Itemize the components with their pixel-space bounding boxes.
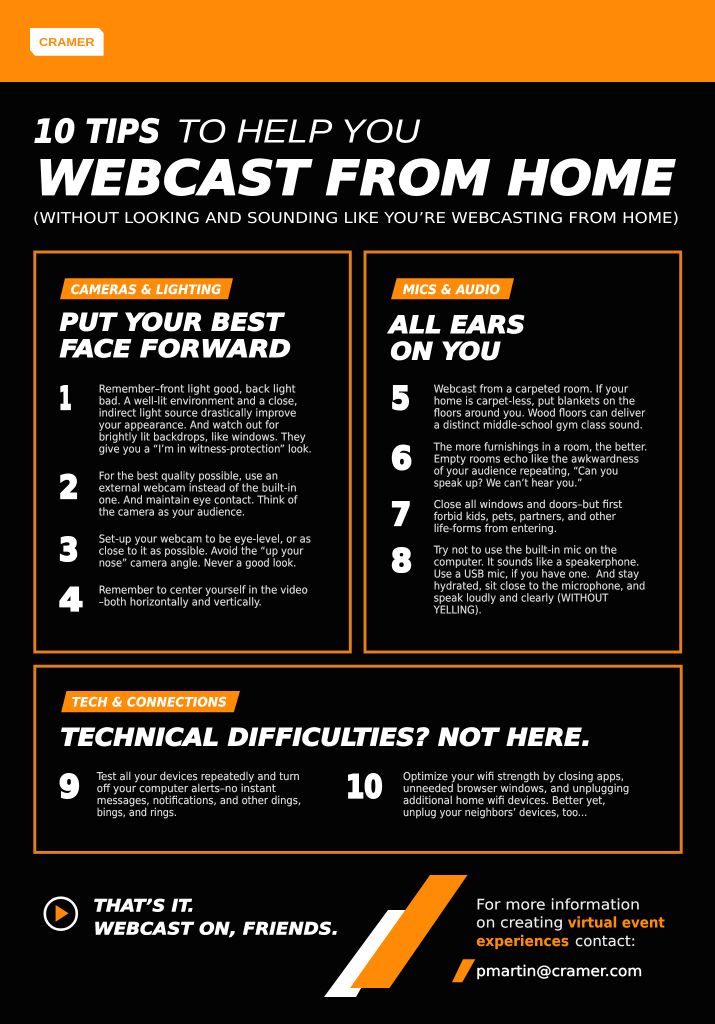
tip 1: brightly lit backdrops, like windows. They [99,431,306,444]
tip 8 [391,543,645,617]
tip 10 [346,769,629,819]
tip 10: unneeded browser windows, and unplugging [403,782,629,795]
tip 1: 1 [59,381,72,417]
title: 10 TIPS [34,112,160,150]
logo: Cramer: CRAMER [39,37,95,49]
tip 2: external webcam instead of the built-in [99,482,297,495]
tip 5: Webcast from a carpeted room. If your [434,383,629,396]
tip 4 [59,583,308,619]
tag: mics and audio: MICS & AUDIO [403,283,500,298]
tip 7: forbid kids, pets, partners, and other [434,510,616,523]
contact email [452,959,642,982]
tip 9: Test all your devices repeatedly and turn [96,770,300,783]
tip 5: home is carpet-less, put blankets on the [434,395,635,408]
contact text: For more information [476,896,640,913]
contact text: contact: [575,933,636,950]
heading: put your best face forward: PUT YOUR BEST [60,308,284,336]
title: TO HELP YOU [176,114,421,151]
tip 6: Empty rooms echo like the awkwardness [434,452,639,465]
tip 2 [59,470,297,519]
tip 9: bings, and rings. [97,806,177,819]
closing message: THAT’S IT. [94,897,194,917]
tip 10: Optimize your wifi strength by closing apps, [403,770,624,783]
contact text: virtual event [568,915,665,932]
tip 9 [59,769,301,819]
tag: tech and connections [61,691,240,712]
tip 8: YELLING). [433,604,482,617]
tip 7 [391,497,622,535]
tag: tech and connections: TECH & CONNECTIONS [72,696,227,711]
tip 7: 7 [391,497,411,533]
tip 6: of your audience repeating, “Can you [434,464,618,477]
tip 2: the camera as your audience. [99,506,245,519]
tip 3: Set-up your webcam to be eye-level, or as [99,532,311,545]
tip 2: 2 [59,470,78,506]
tip 3: 3 [59,533,78,569]
tip 2: For the best quality possible, use an [99,470,278,483]
heading: all ears on you: ALL EARS [387,311,525,339]
heading: put your best face forward: FACE FORWARD [60,335,291,363]
tip 6: The more furnishings in a room, the better. [433,441,647,454]
tag: mics and audio [391,278,514,299]
tip 6: 6 [391,441,412,477]
tip 1: your appearance. And watch out for [99,419,280,432]
tip 6: speak up? We can’t hear you.” [434,476,582,489]
icon: play button [45,898,77,930]
tip 10: unplug your neighbors’ devices, too... [403,806,587,819]
tip 9: messages, notifications, and other dings, [97,794,301,807]
heading: put your best face forward [60,308,291,363]
heading: technical difficulties: TECHNICAL DIFFICULTIES? NOT HERE. [60,723,591,751]
tip 4: –both horizontally and vertically. [99,596,262,609]
tip 8: computer. It sounds like a speakerphone. [434,556,639,569]
contact text [476,896,665,950]
tip 8: hydrated, sit close to the microphone, and [434,580,645,593]
contact text: experiences [476,933,569,950]
heading: all ears on you [387,311,525,366]
tip 4: 4 [59,583,83,619]
tip 10: additional home wifi devices. Better yet, [403,794,605,807]
heading: all ears on you: ON YOU [390,338,500,366]
tip 5: floors around you. Wood floors can deliver [434,407,646,420]
closing message: WEBCAST ON, FRIENDS. [94,920,339,940]
tip 1 [59,381,312,456]
tip 5 [391,381,646,432]
tip 1: Remember–front light good, back light [99,383,296,396]
panel: cameras and lighting [35,252,350,652]
contact text: on creating [476,915,563,932]
tip 5: a distinct middle-school gym class sound. [434,419,643,432]
tag: cameras and lighting [60,278,233,299]
tip 7: Close all windows and doors–but first [434,498,622,511]
closing message [94,897,339,940]
tip 6 [391,441,647,489]
logo: Cramer [30,28,104,56]
header band [0,0,715,82]
tip 5: 5 [391,381,410,417]
tip 8: 8 [391,543,412,579]
tip 3 [59,532,311,569]
tip 8: Try not to use the built-in mic on the [433,544,617,557]
tip 3: close to it as possible. Avoid the “up your [99,544,304,557]
tip 10: 10 [346,769,382,805]
tip 9: off your computer alerts–no instant [97,782,276,795]
tip 3: nose” camera angle. Never a good look. [99,556,296,569]
tip 4: Remember to center yourself in the video [99,584,308,597]
panel: mics and audio [365,252,681,652]
tag: cameras and lighting: CAMERAS & LIGHTING [71,283,222,298]
tip 9: 9 [59,769,80,805]
tip 8: Use a USB mic, if you have one. And stay [434,568,640,581]
title: WEBCAST FROM HOME [36,152,676,206]
graphic: diagonal stripes [324,875,468,997]
tip 2: one. And maintain eye contact. Think of [99,494,297,506]
title [34,112,676,206]
subtitle: (WITHOUT LOOKING AND SOUNDING LIKE YOU’RE WEBCASTING FROM HOME) [33,209,679,227]
tip 1: bad. A well-lit environment and a close, [99,395,297,408]
tip 8: speak loudly and clearly (WITHOUT [434,592,609,605]
tip 7: life-forms from entering. [434,522,557,535]
contact email: pmartin@cramer.com [476,963,642,980]
tip 1: indirect light source drastically improve [99,407,297,420]
tip 1: give you a “I’m in witness-protection” look. [99,443,312,456]
panel: tech and connections [35,666,681,852]
